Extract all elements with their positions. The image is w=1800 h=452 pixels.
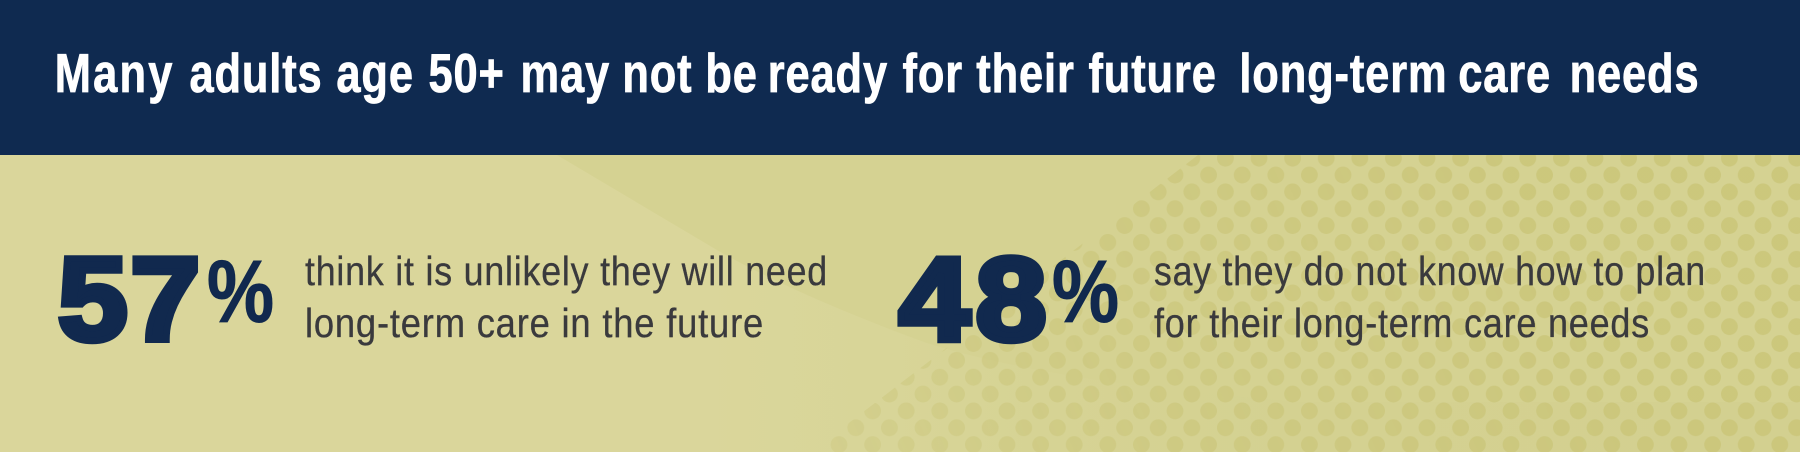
stat description: say they do not know how to plan xyxy=(1154,248,1706,294)
stat number 48: 48 xyxy=(899,234,1047,366)
title: ready xyxy=(768,42,901,104)
stat description: for their long-term care needs xyxy=(1154,300,1650,346)
title: long-term xyxy=(1239,42,1460,104)
percent sign: % xyxy=(1052,242,1119,341)
background: darker angled shape xyxy=(557,155,1800,402)
header band xyxy=(0,0,1800,155)
background: halftone dot field xyxy=(811,155,1800,452)
title: be xyxy=(705,42,771,104)
percent sign: % xyxy=(207,242,274,341)
background: light khaki panel xyxy=(0,155,1800,452)
title: 50+ xyxy=(429,42,518,104)
stat description xyxy=(1154,248,1706,346)
stat description xyxy=(305,248,828,346)
title: for xyxy=(903,42,976,104)
title: may xyxy=(520,42,623,104)
title: not xyxy=(622,42,705,104)
title: future xyxy=(1088,42,1230,104)
stat description: think it is unlikely they will need xyxy=(305,248,828,294)
title: age xyxy=(336,42,427,104)
panel: stat 48 percent xyxy=(899,234,1706,366)
title: Many xyxy=(55,42,189,104)
stat description: long-term care in the future xyxy=(305,300,764,346)
stat number 57: 57 xyxy=(58,233,200,365)
title: needs xyxy=(1570,42,1699,104)
panel: stat 57 percent xyxy=(58,233,828,365)
title: care xyxy=(1458,42,1564,104)
title: adults xyxy=(189,42,336,104)
title: their xyxy=(976,42,1088,104)
